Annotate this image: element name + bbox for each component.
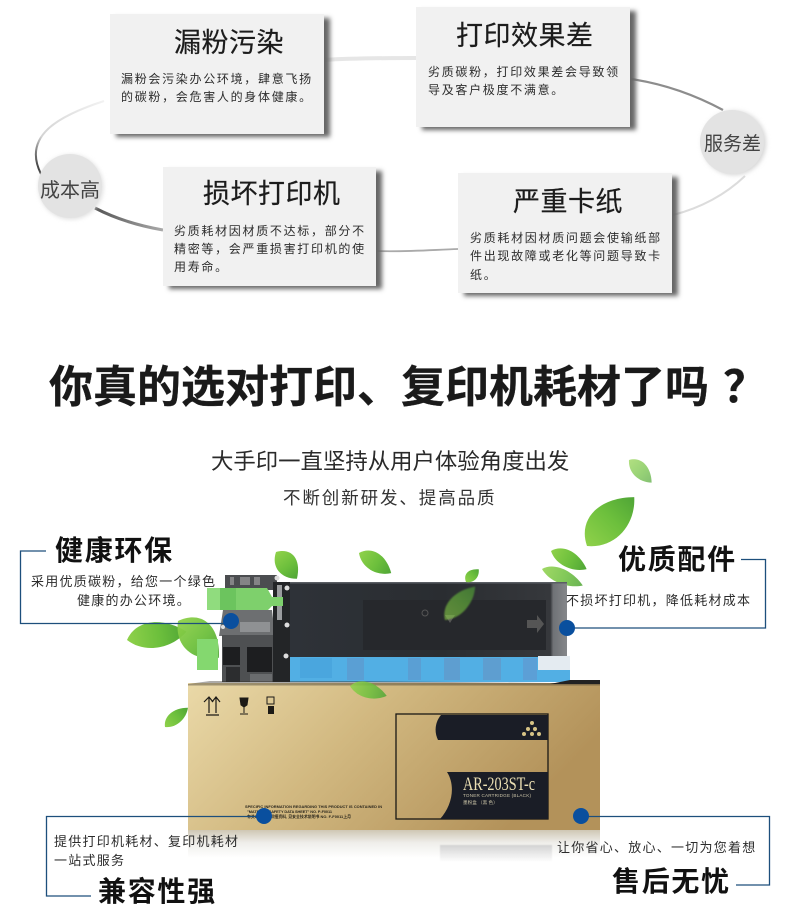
description: 不损坏打印机，降低耗材成本 [566,593,751,608]
text: 损坏打印机 description: 精密等，会严重损害打印机的使 [174,241,366,256]
description: 提供打印机耗材、复印机耗材 [54,834,239,849]
model sub text [463,793,531,806]
box fine print [245,804,382,819]
dot [223,613,239,629]
heading: 兼容性强 [98,876,217,907]
text: 打印效果差 description [428,64,620,97]
text: 严重卡纸 description: 纸。 [470,268,497,282]
blue strip [290,656,570,682]
toner dots [522,721,541,736]
text: 漏粉污染 description: 的碳粉，会危害人的身体健康。 [121,89,313,104]
heading: 损坏打印机: 损坏打印机 [203,179,340,209]
description: 采用优质碳粉，给您一个绿色 [31,574,216,589]
dot [559,620,575,636]
faded leaves over the product [348,565,482,703]
callout: 兼容性强 [46,808,272,907]
text: 严重卡纸 description [470,230,662,282]
product: toner box [188,680,600,862]
description: 健康的办公环境。 [77,593,191,608]
callout: 优质配件 [559,544,766,636]
embossed panel [363,600,546,650]
callout: 售后无忧 [557,808,770,897]
text: 漏粉污染 description: 漏粉会污染办公环境，肆意飞扬 [121,71,313,86]
badge: 成本高 [38,154,103,219]
callout: 健康环保 [20,535,239,629]
heading: 严重卡纸: 严重卡纸 [513,187,623,217]
description: 一站式服务 [54,853,125,868]
box fine print: 有关本产品的详细资料, 见安全技术说明书 NO. F-F0011上月 [247,814,351,819]
main title: 你真的选对打印、复印机耗材了吗 ？ [49,363,767,412]
description [31,574,216,608]
description [54,834,239,868]
text: 严重卡纸 description: 件出现故障或老化等问题导致卡 [470,248,662,263]
heading: 优质配件 [618,544,737,575]
dot [573,808,589,824]
box fine print: SPECIFIC INFORMATION REGARDING THIS PRODUCT IS CONTAINED IN [245,804,382,809]
badge: 成本高: 成本高 [40,179,100,202]
text: 损坏打印机 description [174,223,366,274]
subtitle line 1: 大手印一直坚持从用户体验角度出发 [211,449,569,474]
upper black label [436,715,548,740]
panel: 漏粉污染 [110,14,330,137]
model sub text: 墨粉盒 （黑 色） [463,799,498,806]
panel: 严重卡纸 [458,173,678,296]
text: 打印效果差 description: 劣质碳粉，打印效果差会导致领 [428,64,620,79]
green block [197,639,218,670]
badge: 服务差: 服务差 [704,133,761,155]
lower black label [440,772,548,819]
falling leaves [125,454,658,731]
model number: AR-203ST-c [463,774,535,795]
subtitle line 2: 不断创新研发、提高品质 [283,488,496,508]
handling icons [204,697,274,715]
badge: 服务差 [700,110,766,175]
connector arcs [36,58,745,251]
text: 损坏打印机 description: 劣质耗材因材质不达标，部分不 [174,223,366,238]
text: 损坏打印机 description: 用寿命。 [174,259,229,274]
left end cap [219,575,290,682]
box fine print: "MATERIAL SAFETY DATA SHEET" NO. P-F0011 [247,809,333,814]
heading: 打印效果差: 打印效果差 [456,21,594,51]
description: 让你省心、放心、一切为您着想 [557,840,757,855]
text: 严重卡纸 description: 劣质耗材因材质问题会使输纸部 [470,230,662,245]
heading: 漏粉污染: 漏粉污染 [174,28,284,58]
text: 打印效果差 description: 导及客户极度不满意。 [428,82,565,97]
dot [256,808,272,824]
model sub text: TONER CARTRIDGE (BLACK) [463,793,531,798]
cartridge body [290,582,567,660]
green latch [207,588,283,610]
box label frame [396,714,548,819]
heading: 健康环保 [55,535,174,566]
text: 漏粉污染 description [121,71,313,104]
panel: 打印效果差 [416,7,636,130]
panel: 损坏打印机 [163,167,382,289]
heading: 售后无忧 [612,866,731,897]
product: toner cartridge [197,575,570,682]
